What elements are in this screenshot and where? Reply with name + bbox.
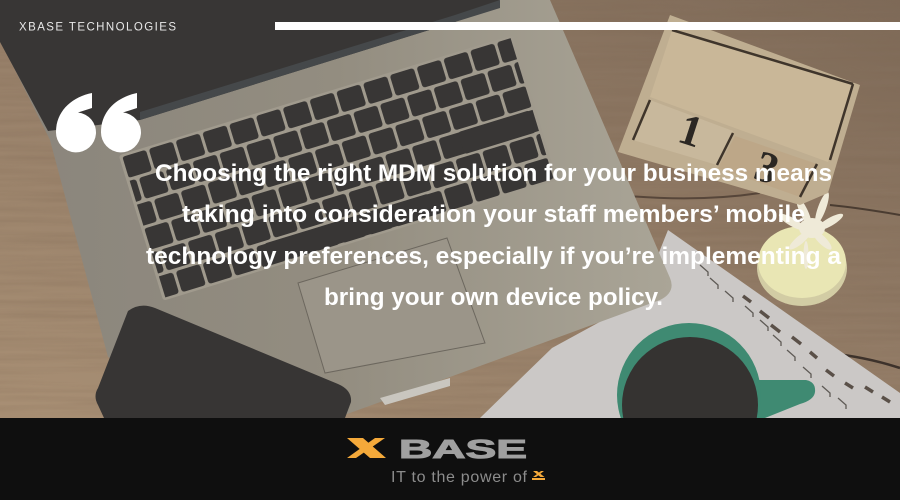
calendar lid [650,30,853,162]
paper notebook [480,230,900,418]
calendar numerals [679,117,778,182]
coffee mug [617,323,816,418]
laptop front lip [380,378,450,405]
calendar numerals: 1 [673,104,709,157]
header rule [275,22,900,30]
logo mark X [347,438,386,458]
smartphone [96,306,351,418]
keyboard [119,35,557,301]
quote text: Choosing the right MDM solution for your business means [155,160,832,187]
quote text [146,160,842,311]
logo wordmark: BASE [399,434,527,464]
tagline x mark [532,471,545,480]
quote text: bring your own device policy. [324,284,663,311]
calendar numerals: 3 [749,141,785,194]
header label: XBASE TECHNOLOGIES [19,22,176,34]
quote text: technology preferences, especially if you’re implementing a [146,243,842,270]
icon: quotation mark [56,93,141,152]
wooden calendar box [618,15,860,205]
laptop base [0,0,672,414]
quote text: taking into consideration your staff members’ mobile [182,201,805,228]
candle with flower [757,191,847,306]
XBASE logo [347,434,527,464]
laptop screen [0,0,500,131]
footer band [0,418,900,500]
tagline: IT to the power of [391,469,528,486]
trackpad [298,238,485,373]
